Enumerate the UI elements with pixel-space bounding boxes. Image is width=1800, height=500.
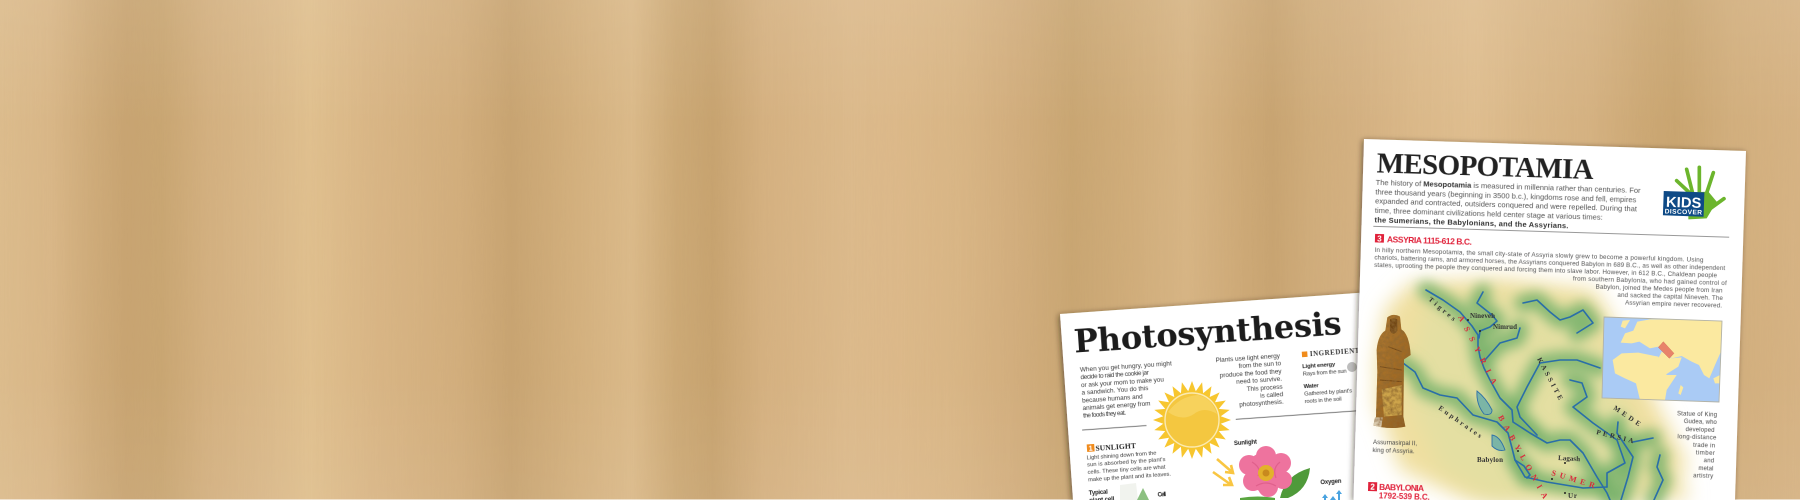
map labels: Ur	[1568, 492, 1577, 500]
map land wash	[1375, 278, 1690, 470]
ingredients list: Rays from the sun	[1303, 369, 1347, 378]
sunlight paragraph: Light shining down from the	[1086, 451, 1157, 461]
icon: oxygen arrows	[1322, 490, 1342, 500]
intro paragraph	[1374, 178, 1641, 232]
green hand	[1677, 167, 1724, 219]
map labels: Euphrates	[1437, 404, 1483, 440]
babylonia heading	[1368, 482, 1430, 500]
caption: assurnasirpal: king of Assyria.	[1372, 448, 1415, 455]
title: MESOPOTAMIA	[1376, 147, 1594, 186]
caption: statue of king gudea: timber	[1696, 450, 1715, 457]
map labels: Nimrud	[1493, 323, 1517, 331]
intro paragraph: three thousand years (beginning in 3500 b.c.), kingdoms rose and fell, empires	[1375, 187, 1637, 204]
caption: statue of king gudea: developed	[1685, 427, 1715, 434]
ingredients list	[1302, 361, 1353, 405]
right-aligned paragraph: photosynthesis.	[1239, 399, 1284, 409]
blue wordmark: KIDS	[1666, 195, 1702, 212]
ingredients list: Water	[1303, 383, 1320, 390]
assyria paragraph: Babylon, joined the Medes people from Iran	[1595, 284, 1723, 295]
intro paragraph: expanded and contracted, outsiders conquered and were repelled. During that	[1375, 197, 1638, 214]
sunlight paragraph: sun is absorbed by the plant's	[1087, 457, 1166, 469]
intro paragraph: When you get hungry, you might	[1080, 360, 1172, 374]
map of mesopotamia	[1375, 278, 1690, 500]
ingredients heading: INGREDIENTS	[1310, 347, 1364, 358]
sunlight paragraph: make up the plant and its leaves.	[1088, 471, 1172, 483]
map region labels: ASSYRIA	[1456, 314, 1499, 386]
lakes	[1477, 391, 1505, 450]
intro paragraph	[1080, 360, 1175, 420]
inset highlighted region	[1658, 342, 1674, 358]
assyria paragraph: chariots, battering rams, and armored horses, the Assyrians conquered Babylon in 689 B.C., as well as other independent	[1374, 255, 1726, 272]
caption: statue of king gudea: long-distance	[1677, 434, 1717, 442]
right-aligned paragraph: Plants use light energy	[1215, 353, 1281, 364]
intro paragraph: or ask your mom to make you	[1081, 376, 1165, 389]
right-aligned paragraph: This process	[1246, 383, 1283, 393]
right-aligned paragraph: produce the food they	[1219, 368, 1283, 379]
caption: statue of king gudea	[1675, 411, 1718, 480]
poster sheet	[1354, 139, 1746, 500]
river glow	[1403, 290, 1663, 500]
assyria heading: 3	[1377, 234, 1382, 243]
assyria paragraph: In hilly northern Mesopotamia, the small city-state of Assyria slowly grew to become a powerful kingdom. Using	[1374, 247, 1704, 264]
assyria paragraph	[1373, 247, 1728, 310]
map region labels: BABYLONIA	[1496, 414, 1550, 500]
diagram labels: Oxygen	[1320, 479, 1342, 486]
divider	[1373, 226, 1729, 237]
map labels: Nineveh	[1470, 312, 1495, 320]
map labels: PERSIA	[1596, 428, 1634, 445]
blue wordmark	[1663, 191, 1704, 217]
assyria paragraph: states, uprooting the people they conquered and forcing them into slave labor. However, in 612 B.C., Chaldean people	[1374, 262, 1718, 280]
caption: statue of king gudea: metal	[1698, 466, 1713, 472]
diagram labels: Cell	[1157, 492, 1167, 499]
poster text	[1073, 303, 1373, 500]
title: Photosynthesis	[1073, 304, 1343, 361]
map labels	[1427, 295, 1642, 500]
intro paragraph: the Sumerians, the Babylonians, and the Assyrians.	[1374, 215, 1569, 230]
caption: statue of king gudea: artistry	[1693, 473, 1713, 480]
left divider	[1082, 426, 1146, 430]
babylonia heading: 2	[1370, 483, 1375, 492]
caption: statue of king gudea: and	[1704, 458, 1714, 465]
statue of Assurnasirpal II	[1373, 315, 1411, 428]
caption: statue of king gudea: Statue of King	[1677, 411, 1717, 419]
poster sheet	[1060, 291, 1400, 500]
intro paragraph: animals get energy from	[1082, 400, 1151, 412]
icon: sunlight arrows	[1213, 459, 1233, 485]
sunlight paragraph: cells. These tiny cells are what	[1087, 464, 1166, 476]
caption: statue of king gudea: Gudea, who	[1684, 419, 1718, 426]
diagram labels: Sunlight	[1234, 439, 1257, 447]
diagram labels: Typical	[1089, 490, 1108, 497]
assyria paragraph: Assyrian empire never recovered.	[1625, 300, 1722, 310]
assyria paragraph: and sacked the capital Nineveh. The	[1617, 292, 1723, 302]
map labels: KASSITE	[1535, 356, 1565, 402]
map region labels	[1456, 314, 1596, 500]
map labels: Tigres	[1427, 295, 1457, 323]
intro paragraph: because humans and	[1082, 393, 1143, 404]
map labels: Babylon	[1477, 456, 1503, 464]
right divider	[1236, 410, 1367, 419]
map labels: Lagash	[1558, 454, 1580, 463]
sunlight paragraph	[1086, 450, 1172, 483]
assyria paragraph: from southern Babylonia, who had gained control of	[1573, 276, 1727, 287]
intro paragraph: decide to raid the cookie jar	[1080, 370, 1150, 381]
right-aligned paragraph: need to survive.	[1236, 376, 1283, 386]
panel: photosynthesis poster	[1060, 291, 1400, 500]
sunlight heading: 1	[1089, 445, 1093, 453]
ingredients list: Light energy	[1302, 362, 1336, 370]
map region labels: SUMER	[1550, 468, 1596, 490]
map place dots	[1467, 319, 1566, 494]
icon: plant cell sketch	[1120, 483, 1149, 500]
blue wordmark: DISCOVER	[1665, 208, 1702, 217]
intro paragraph: time, three dominant civilizations held center stage at various times:	[1375, 206, 1603, 222]
caption: statue of king gudea: trade in	[1693, 443, 1715, 449]
assyria heading: ASSYRIA 1115-612 B.C.	[1387, 234, 1472, 247]
babylonia heading: BABYLONIA	[1379, 482, 1424, 493]
rivers	[1403, 290, 1663, 500]
icon: grey water droplet	[1347, 362, 1357, 372]
sunlight heading: SUNLIGHT	[1095, 441, 1136, 453]
intro paragraph: a sandwich. You do this	[1081, 385, 1149, 397]
inset world map	[1602, 317, 1722, 402]
intro paragraph: The history of Mesopotamia is measured in millennia rather than centuries. For	[1376, 178, 1641, 195]
map labels: MEDE	[1612, 404, 1642, 428]
panel: mesopotamia poster	[1354, 139, 1746, 500]
right-aligned paragraph: is called	[1260, 391, 1284, 400]
kids discover logo	[1663, 167, 1724, 219]
caption: assurnasirpal: Assurnasirpal II,	[1373, 440, 1417, 447]
poster text	[1371, 147, 1732, 310]
inset land masses	[1613, 319, 1722, 400]
ingredients list: Gathered by plant's	[1304, 388, 1352, 398]
intro paragraph: the foods they eat.	[1083, 410, 1127, 420]
diagram labels	[1086, 434, 1342, 500]
icon: pink flower with leaves	[1239, 446, 1310, 500]
icon: sun	[1153, 381, 1231, 459]
right-aligned paragraph	[1215, 353, 1285, 410]
ingredients list: roots in the soil	[1305, 397, 1342, 405]
right-aligned paragraph: from the sun to	[1238, 360, 1282, 370]
caption: assurnasirpal	[1372, 440, 1417, 455]
